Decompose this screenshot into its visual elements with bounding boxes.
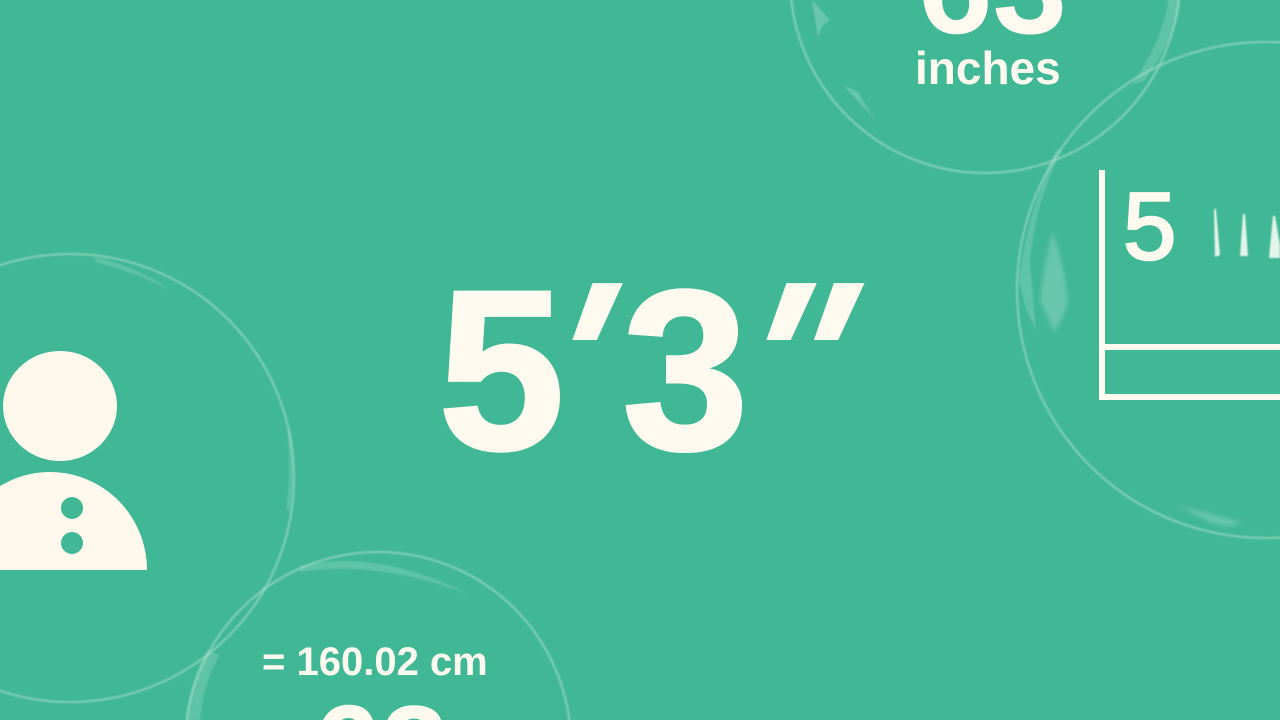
bubble: right with ruler: [1017, 42, 1280, 538]
ruler number: 5: 5: [1123, 173, 1176, 280]
label: inches: inches: [915, 42, 1061, 94]
title: 5'3": ": [688, 234, 899, 489]
person head: [3, 351, 117, 461]
bubble: top with inches: [790, 0, 1181, 173]
ruler tick marks: [1214, 209, 1280, 258]
icon: person: [0, 351, 147, 570]
bubble: bottom with centimetres: [185, 552, 571, 720]
title: 5'3": 3: [622, 244, 749, 498]
bubble: left with person: [0, 254, 294, 702]
label: 160.02 cm: = 160.02 cm: [262, 640, 488, 684]
title: 5'3": 5: [438, 244, 565, 498]
ruler: [1102, 170, 1280, 397]
title: 5'3": ': [497, 234, 654, 489]
title: 5'3": [438, 234, 899, 498]
person body: [0, 472, 147, 570]
person buttons: [61, 497, 83, 554]
